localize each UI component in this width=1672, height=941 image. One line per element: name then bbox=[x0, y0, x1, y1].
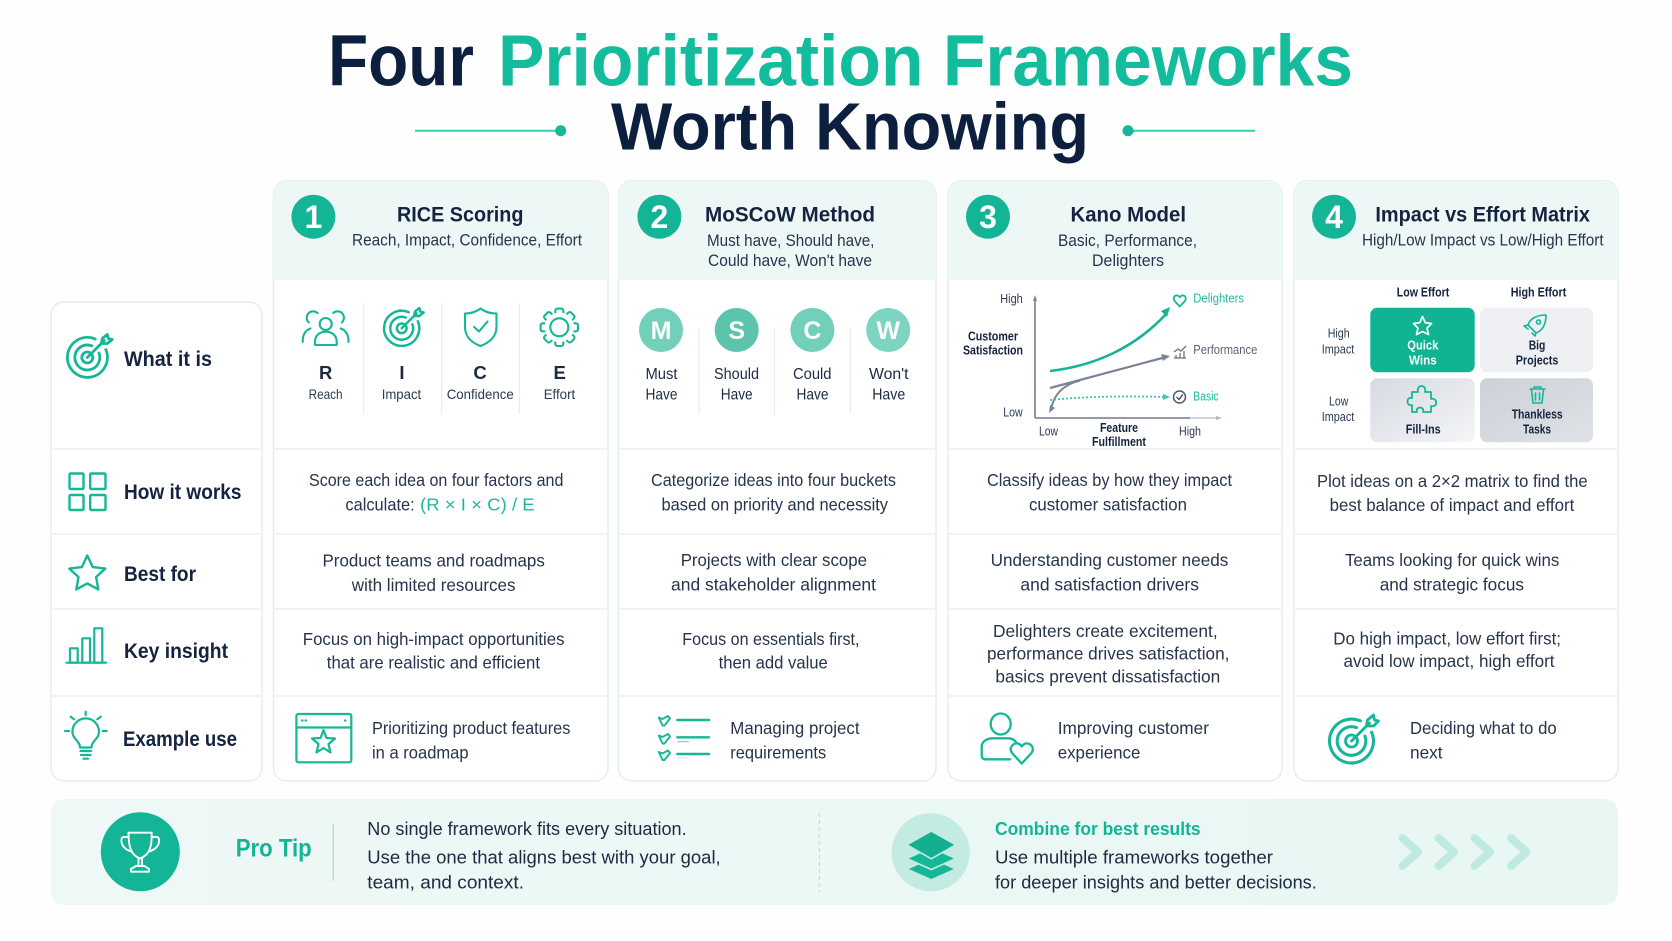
panel: RICE Scoring: Confidence bbox=[447, 386, 514, 402]
panel: RICE Scoring: Reach bbox=[309, 386, 343, 402]
header: Kano Model: Delighters bbox=[1092, 252, 1164, 270]
panel: Kano Model: Delighters create excitement, bbox=[993, 621, 1218, 641]
icon: trophy bbox=[101, 812, 180, 891]
icon: checklist bbox=[659, 716, 709, 760]
badge S: S bbox=[728, 317, 745, 345]
panel: RICE Scoring: C bbox=[473, 362, 487, 383]
chart: Kano curves bbox=[963, 292, 1257, 449]
arrows: chevrons bbox=[1402, 838, 1526, 866]
chart: 2x2 matrix: Low bbox=[1329, 395, 1349, 409]
cell: Quick Wins: Quick bbox=[1407, 337, 1439, 352]
header: Impact vs Effort Matrix: High/Low Impact vs Low/High Effort bbox=[1362, 232, 1604, 250]
icon: target bbox=[67, 334, 112, 377]
icon: gear bbox=[541, 309, 578, 346]
icon: star bbox=[69, 556, 105, 589]
title: Worth Knowing bbox=[611, 89, 1089, 164]
panel: RICE Scoring: that are realistic and efficient bbox=[327, 652, 540, 672]
header: Kano Model: Kano Model bbox=[1070, 204, 1186, 227]
text: pro tip message: Use the one that aligns best with your goal, bbox=[367, 846, 721, 867]
panel: pro tip band bbox=[51, 799, 1618, 905]
panel: Kano Model: Classify ideas by how they impact bbox=[987, 470, 1232, 490]
panel: Impact vs Effort Matrix bbox=[1294, 181, 1618, 781]
label: pro tip: Pro Tip bbox=[236, 835, 312, 863]
panel: MoSCoW Method: based on priority and necessity bbox=[662, 495, 888, 515]
cell: Quick Wins bbox=[1370, 308, 1475, 372]
panel: MoSCoW Method bbox=[618, 181, 936, 781]
label: key insight: Key insight bbox=[124, 640, 228, 663]
panel: RICE Scoring: with limited resources bbox=[351, 575, 516, 595]
header: MoSCoW Method: Must have, Should have, bbox=[707, 232, 874, 250]
chart: Kano curves: Satisfaction bbox=[963, 344, 1023, 358]
title bbox=[328, 21, 1353, 164]
panel: MoSCoW Method: requirements bbox=[730, 742, 826, 762]
text: combine message: Use multiple frameworks together bbox=[995, 846, 1273, 867]
panel: Impact vs Effort Matrix: best balance of impact and effort bbox=[1330, 495, 1574, 515]
chart: Kano curves: Low bbox=[1003, 406, 1024, 420]
chart: Kano curves: Basic bbox=[1193, 390, 1219, 404]
panel: RICE Scoring: Impact bbox=[382, 386, 421, 402]
cell: Fill-Ins: Fill-Ins bbox=[1406, 421, 1441, 436]
header: RICE Scoring: RICE Scoring bbox=[397, 204, 524, 227]
panel: Impact vs Effort Matrix: Plot ideas on a 2×2 matrix to find the bbox=[1317, 471, 1588, 491]
badge W: W bbox=[876, 317, 900, 345]
icon: bars bbox=[66, 628, 106, 663]
chart: 2x2 matrix: Impact bbox=[1322, 342, 1355, 356]
chart: Kano curves: Low bbox=[1039, 425, 1059, 439]
icon: check circle bbox=[1174, 391, 1186, 403]
panel: row labels bbox=[51, 302, 262, 781]
chart: 2x2 matrix: Low Effort bbox=[1397, 286, 1450, 300]
chart: 2x2 matrix: High Effort bbox=[1511, 286, 1567, 300]
panel: RICE Scoring: calculate: bbox=[345, 495, 415, 515]
header: MoSCoW Method: MoSCoW Method bbox=[705, 204, 875, 227]
text: pro tip message bbox=[367, 818, 721, 892]
text: combine message: Combine for best results bbox=[995, 818, 1201, 839]
curve: delighters bbox=[1050, 307, 1170, 371]
panel: MoSCoW Method: Projects with clear scope bbox=[681, 550, 867, 570]
panel: Kano Model: customer satisfaction bbox=[1029, 495, 1187, 515]
chart: 2x2 matrix: High bbox=[1328, 326, 1350, 340]
cell: Thankless Tasks: Tasks bbox=[1523, 421, 1551, 436]
icon: browser window with star bbox=[296, 714, 351, 762]
badge S bbox=[715, 308, 759, 352]
panel: MoSCoW Method: Won't bbox=[869, 366, 909, 383]
panel: RICE Scoring: Effort bbox=[544, 386, 575, 402]
number badge 4 bbox=[1312, 195, 1356, 239]
panel: RICE Scoring bbox=[274, 181, 608, 781]
text: combine message: for deeper insights and better decisions. bbox=[995, 871, 1317, 892]
cell: Quick Wins: Wins bbox=[1409, 353, 1437, 368]
panel: MoSCoW Method: Have bbox=[721, 386, 753, 404]
header: Kano Model bbox=[948, 181, 1282, 280]
panel: RICE Scoring: (R × I × C) / E bbox=[420, 495, 535, 515]
icon: layers bbox=[892, 813, 970, 891]
panel: MoSCoW Method: Should bbox=[714, 366, 759, 383]
panel: RICE Scoring: I bbox=[399, 362, 405, 383]
icon: lightbulb bbox=[65, 712, 107, 759]
icon: grid bbox=[70, 474, 106, 510]
panel: MoSCoW Method: Have bbox=[646, 386, 678, 404]
cell: Big Projects: Projects bbox=[1516, 352, 1558, 367]
panel: RICE Scoring: E bbox=[554, 362, 566, 383]
panel: Kano Model: performance drives satisfaction, bbox=[987, 644, 1229, 664]
title: Four bbox=[328, 21, 474, 102]
header: Impact vs Effort Matrix: Impact vs Effort Matrix bbox=[1375, 204, 1590, 227]
icon: shield bbox=[465, 308, 496, 346]
icon: heart bbox=[1174, 295, 1186, 306]
panel: RICE Scoring: R bbox=[319, 362, 332, 383]
panel: Impact vs Effort Matrix: Do high impact, low effort first; bbox=[1333, 628, 1561, 648]
label: how it works: How it works bbox=[124, 481, 242, 504]
label: what it is: What it is bbox=[124, 348, 212, 371]
number badge 1: 1 bbox=[305, 199, 322, 235]
icon: small chart bbox=[1174, 346, 1186, 358]
label: example use: Example use bbox=[123, 728, 237, 751]
panel: MoSCoW Method: Could bbox=[793, 366, 832, 383]
badge C: C bbox=[803, 317, 821, 345]
panel: Kano Model: basics prevent dissatisfaction bbox=[995, 666, 1220, 686]
chart: 2x2 matrix bbox=[1322, 286, 1593, 442]
chart: Kano curves: Feature bbox=[1100, 421, 1138, 435]
panel: MoSCoW Method: and stakeholder alignment bbox=[671, 575, 876, 595]
panel: Kano Model: Understanding customer needs bbox=[991, 550, 1229, 570]
number badge 1 bbox=[291, 195, 335, 239]
icon: person with heart bbox=[982, 714, 1033, 764]
number badge 2 bbox=[637, 195, 681, 239]
panel: MoSCoW Method: then add value bbox=[719, 652, 828, 672]
text: combine message bbox=[995, 818, 1317, 892]
title: Prioritization Frameworks bbox=[498, 21, 1353, 102]
panel: Impact vs Effort Matrix: avoid low impact, high effort bbox=[1344, 651, 1555, 671]
cell: Fill-Ins bbox=[1370, 378, 1475, 442]
panel: MoSCoW Method: Focus on essentials first, bbox=[682, 629, 860, 649]
panel: MoSCoW Method: Have bbox=[872, 386, 905, 404]
panel: Impact vs Effort Matrix: next bbox=[1410, 742, 1443, 762]
curve: basic low bbox=[1049, 380, 1080, 413]
panel: MoSCoW Method: Categorize ideas into four buckets bbox=[651, 470, 896, 490]
header: RICE Scoring: Reach, Impact, Confidence, Effort bbox=[352, 232, 582, 250]
panel: RICE Scoring: Product teams and roadmaps bbox=[322, 551, 545, 571]
panel: Kano Model bbox=[948, 181, 1282, 781]
panel: Impact vs Effort Matrix: Teams looking for quick wins bbox=[1345, 550, 1560, 570]
header: MoSCoW Method bbox=[618, 181, 936, 280]
panel: MoSCoW Method: Must bbox=[646, 366, 678, 383]
number badge 3 bbox=[966, 195, 1010, 239]
panel: MoSCoW Method: Have bbox=[796, 386, 829, 404]
chart: Kano curves: Fulfillment bbox=[1092, 435, 1147, 449]
badge C bbox=[790, 308, 834, 352]
chart: Kano curves: Customer bbox=[968, 330, 1018, 344]
cell: Thankless Tasks: Thankless bbox=[1512, 406, 1563, 421]
chart: Kano curves: High bbox=[1179, 425, 1201, 439]
panel: RICE Scoring: Focus on high-impact opportunities bbox=[303, 629, 565, 649]
badge M: M bbox=[651, 317, 671, 345]
number badge 2: 2 bbox=[651, 199, 668, 235]
header: Kano Model: Basic, Performance, bbox=[1058, 232, 1197, 250]
text: pro tip message: team, and context. bbox=[367, 871, 524, 892]
curve: basic dotted bbox=[1050, 394, 1170, 400]
chart: Kano curves: Delighters bbox=[1193, 292, 1244, 306]
header: RICE Scoring bbox=[274, 181, 608, 280]
panel: MoSCoW Method: Managing project bbox=[730, 718, 860, 738]
icon: people bbox=[303, 311, 349, 345]
chart: 2x2 matrix: Impact bbox=[1322, 410, 1355, 424]
panel: Impact vs Effort Matrix: Deciding what to do bbox=[1410, 718, 1557, 738]
panel: RICE Scoring: Score each idea on four factors and bbox=[309, 470, 563, 490]
text: pro tip message: No single framework fits every situation. bbox=[367, 818, 687, 839]
cell: Big Projects bbox=[1480, 308, 1593, 372]
header: MoSCoW Method: Could have, Won't have bbox=[708, 252, 872, 270]
title accent line right bbox=[1122, 125, 1255, 136]
label: best for: Best for bbox=[124, 563, 196, 586]
badge M bbox=[639, 308, 683, 352]
cell: Big Projects: Big bbox=[1529, 337, 1545, 352]
panel: RICE Scoring: Prioritizing product features bbox=[372, 718, 571, 738]
curve: performance bbox=[1050, 354, 1170, 388]
panel: Kano Model: and satisfaction drivers bbox=[1020, 575, 1199, 595]
panel: Kano Model: Improving customer bbox=[1058, 718, 1209, 738]
panel: Kano Model: experience bbox=[1058, 742, 1140, 762]
panel: RICE Scoring: in a roadmap bbox=[372, 742, 469, 762]
header: Impact vs Effort Matrix bbox=[1294, 181, 1618, 280]
number badge 4: 4 bbox=[1325, 199, 1343, 235]
panel: Impact vs Effort Matrix: and strategic focus bbox=[1380, 575, 1524, 595]
chart: Kano curves: Performance bbox=[1193, 343, 1257, 357]
badge W bbox=[866, 308, 910, 352]
title accent line left bbox=[415, 125, 566, 136]
icon: target bbox=[1329, 715, 1378, 763]
chart: Kano curves: High bbox=[1000, 292, 1023, 306]
icon: target bbox=[384, 308, 424, 346]
cell: Thankless Tasks bbox=[1480, 378, 1593, 442]
number badge 3: 3 bbox=[979, 199, 997, 235]
